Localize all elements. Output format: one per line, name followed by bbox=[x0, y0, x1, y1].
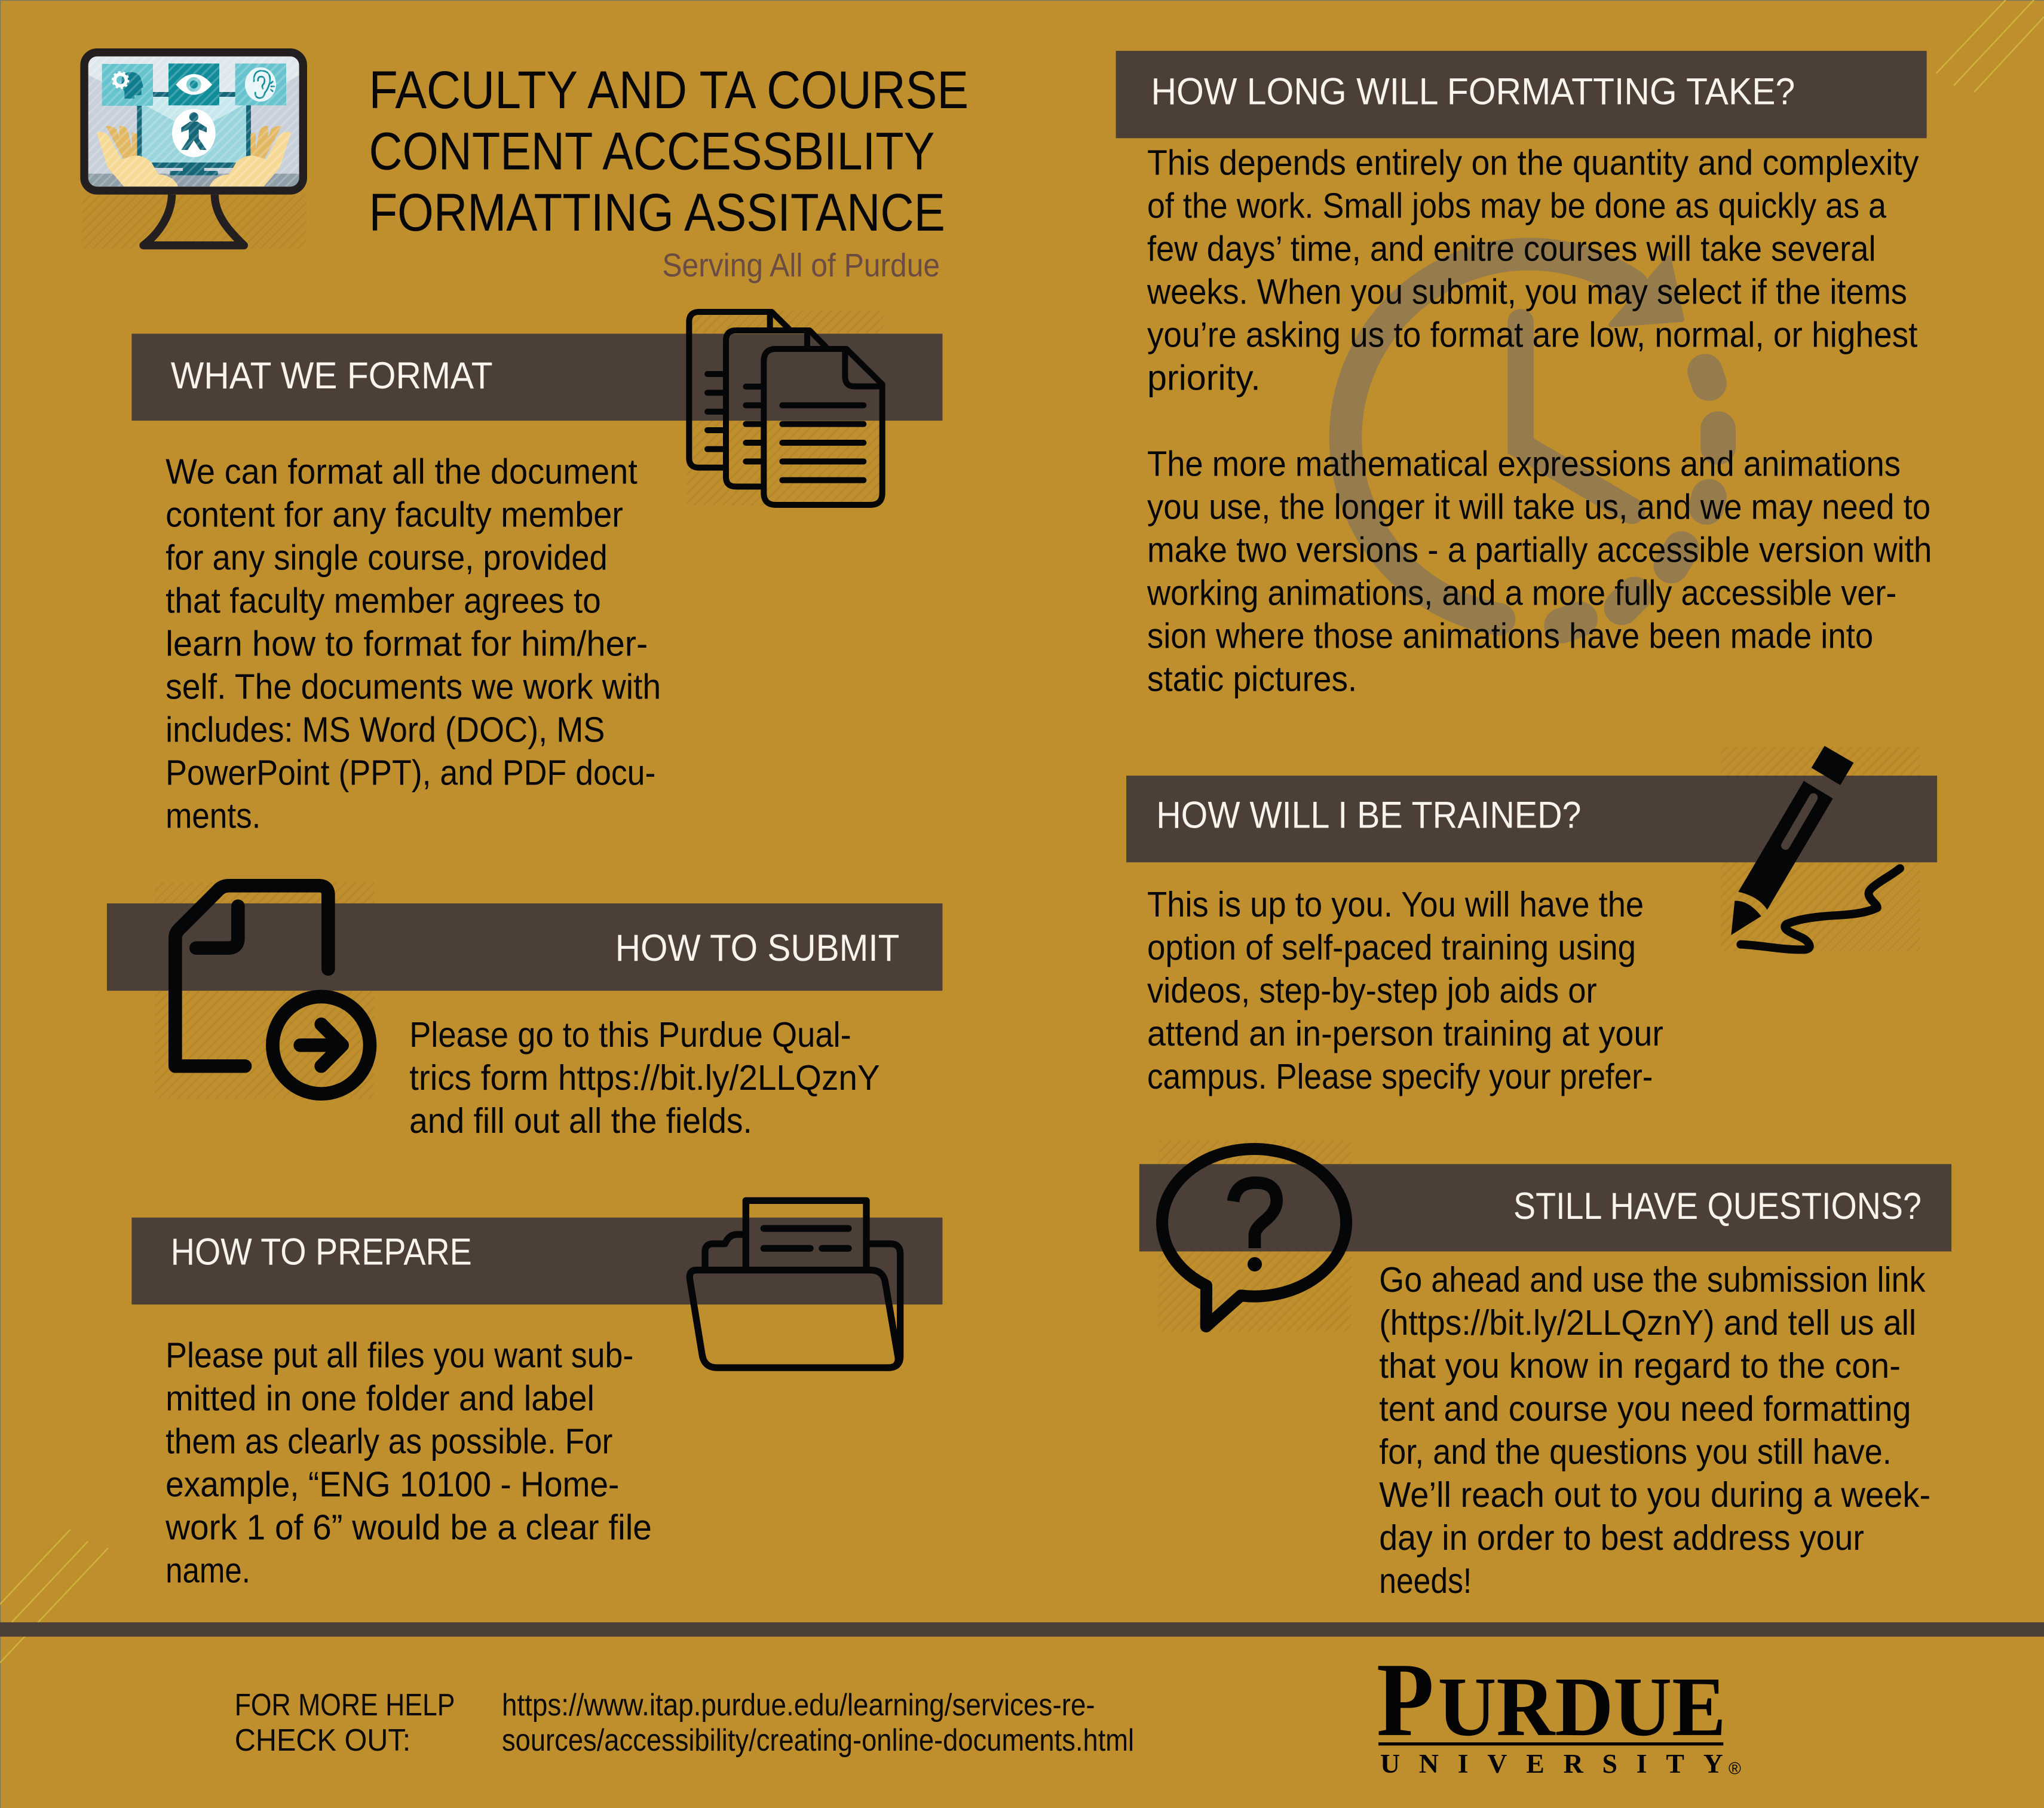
body text: how long paragraph 2: working animations, and a more fully accessible ver- bbox=[1147, 574, 1896, 612]
icon: clock watermark bbox=[1346, 254, 1718, 626]
body text: how long paragraph 1: few days’ time, and enitre courses will take several bbox=[1147, 229, 1876, 268]
icon: submit document arrow bbox=[175, 885, 370, 1094]
panel: what we format bbox=[131, 310, 942, 835]
body text: how to prepare: name. bbox=[166, 1552, 250, 1591]
body text: still have questions: needs! bbox=[1379, 1562, 1472, 1601]
logo: Purdue University: P bbox=[1377, 1642, 1434, 1758]
body text: how will I be trained: This is up to you. You will have the bbox=[1147, 885, 1644, 924]
panel: still have questions bbox=[1139, 1141, 1951, 1601]
body text: still have questions: for, and the questions you still have. bbox=[1379, 1433, 1892, 1472]
decorative lines: bottom left bbox=[0, 1530, 108, 1663]
icon: speech bubble question bbox=[1162, 1149, 1346, 1326]
heading: still have questions: STILL HAVE QUESTIONS? bbox=[1513, 1185, 1922, 1227]
body text: how long paragraph 1: This depends entirely on the quantity and complexity bbox=[1147, 143, 1919, 182]
footer: more help label: CHECK OUT: bbox=[235, 1723, 410, 1758]
panel: how to prepare bbox=[131, 1200, 942, 1591]
body text: how long paragraph 2: make two versions - a partially accessible version with bbox=[1147, 531, 1932, 569]
footer: help url: sources/accessibility/creating-online-documents.html bbox=[502, 1723, 1134, 1758]
body text: how long paragraph 2 bbox=[1147, 445, 1932, 698]
heading: how will I be trained: HOW WILL I BE TRAINED? bbox=[1156, 794, 1581, 836]
body text: how will I be trained: attend an in-person training at your bbox=[1147, 1015, 1663, 1053]
body text: how to prepare: mitted in one folder and label bbox=[166, 1380, 594, 1418]
body text: what we format: content for any faculty member bbox=[166, 495, 623, 534]
body text: how long paragraph 1: priority. bbox=[1147, 358, 1261, 397]
body text: still have questions: tent and course you need formatting bbox=[1379, 1390, 1911, 1429]
body text: still have questions: that you know in regard to the con- bbox=[1379, 1347, 1901, 1386]
body text: how will I be trained: videos, step-by-step job aids or bbox=[1147, 972, 1597, 1010]
body text: still have questions: (https://bit.ly/2LLQznY) and tell us all bbox=[1379, 1304, 1916, 1343]
body text: how long paragraph 1: weeks. When you submit, you may select if the items bbox=[1147, 272, 1907, 311]
logo: Purdue University bbox=[1377, 1642, 1741, 1779]
body text: how to prepare: Please put all files you want sub- bbox=[166, 1337, 633, 1375]
body text: still have questions bbox=[1379, 1261, 1930, 1601]
heading: what we format: WHAT WE FORMAT bbox=[171, 355, 493, 397]
footer: more help label bbox=[235, 1688, 455, 1758]
logo: Purdue University: ® bbox=[1729, 1759, 1741, 1778]
footer divider bbox=[0, 1622, 2044, 1637]
body text: what we format bbox=[166, 452, 661, 835]
body text: how long paragraph 2: sion where those animations have been made into bbox=[1147, 617, 1873, 655]
body text: what we format: learn how to format for him/her- bbox=[166, 624, 648, 663]
body text: what we format: self. The documents we work with bbox=[166, 667, 661, 706]
footer: help url: https://www.itap.purdue.edu/learning/services-re- bbox=[502, 1688, 1095, 1723]
heading: how to submit: HOW TO SUBMIT bbox=[615, 927, 899, 969]
body text: how long paragraph 2: static pictures. bbox=[1147, 660, 1357, 698]
body text: how will I be trained: campus. Please specify your prefer- bbox=[1147, 1058, 1653, 1096]
heading: how long: HOW LONG WILL FORMATTING TAKE? bbox=[1151, 71, 1795, 113]
body text: how long paragraph 2: The more mathematical expressions and animations bbox=[1147, 445, 1901, 483]
footer: help url bbox=[502, 1688, 1134, 1758]
icon: pen signature bbox=[1731, 746, 1900, 949]
logo: Purdue University: UNIVERSITY bbox=[1380, 1748, 1723, 1779]
body text: how to submit: Please go to this Purdue Qual- bbox=[409, 1016, 851, 1055]
body text: how long paragraph 2: you use, the longer it will take us, and we may need to bbox=[1147, 488, 1930, 526]
body text: how long paragraph 1: of the work. Small jobs may be done as quickly as a bbox=[1147, 186, 1886, 225]
title: FORMATTING ASSITANCE bbox=[369, 182, 945, 242]
body text: how long paragraph 1 bbox=[1147, 143, 1919, 397]
body text: still have questions: day in order to best address your bbox=[1379, 1519, 1864, 1558]
panel: how to submit bbox=[107, 882, 942, 1141]
body text: how to submit bbox=[409, 1016, 880, 1141]
logo: Purdue University: URDUE bbox=[1438, 1660, 1726, 1754]
footer: more help label: FOR MORE HELP bbox=[235, 1688, 455, 1723]
body text: how will I be trained: option of self-paced training using bbox=[1147, 928, 1636, 967]
body text: how will I be trained bbox=[1147, 885, 1663, 1096]
body text: how to submit: and fill out all the fields. bbox=[409, 1102, 752, 1141]
body text: how long paragraph 1: you’re asking us to format are low, normal, or highest bbox=[1147, 315, 1917, 354]
title bbox=[369, 60, 969, 242]
subtitle: Serving All of Purdue bbox=[662, 247, 940, 284]
body text: how to prepare: work 1 of 6” would be a clear file bbox=[165, 1509, 652, 1547]
title: FACULTY AND TA COURSE bbox=[369, 60, 969, 119]
icon: folder bbox=[689, 1200, 900, 1368]
body text: how to prepare bbox=[165, 1337, 652, 1591]
body text: how to submit: trics form https://bit.ly/2LLQznY bbox=[409, 1059, 880, 1098]
icon: accessibility monitor bbox=[82, 53, 307, 249]
decorative lines: top right bbox=[1936, 0, 2044, 92]
icon: documents bbox=[689, 312, 882, 505]
body text: what we format: includes: MS Word (DOC), MS bbox=[166, 710, 605, 749]
body text: what we format: for any single course, provided bbox=[166, 538, 608, 577]
body text: what we format: PowerPoint (PPT), and PDF docu- bbox=[166, 753, 655, 792]
heading: how to prepare: HOW TO PREPARE bbox=[171, 1231, 472, 1273]
body text: still have questions: We’ll reach out to you during a week- bbox=[1379, 1476, 1930, 1515]
panel: how long will formatting take bbox=[1116, 51, 1932, 698]
panel: how will I be trained bbox=[1126, 746, 1937, 1096]
body text: still have questions: Go ahead and use the submission link bbox=[1379, 1261, 1926, 1300]
title: CONTENT ACCESSBILITY bbox=[369, 121, 934, 181]
body text: how to prepare: example, “ENG 10100 - Home- bbox=[166, 1466, 619, 1504]
body text: what we format: We can format all the document bbox=[166, 452, 638, 491]
body text: what we format: ments. bbox=[166, 796, 261, 835]
body text: what we format: that faculty member agrees to bbox=[166, 581, 601, 620]
body text: how to prepare: them as clearly as possible. For bbox=[166, 1423, 612, 1461]
